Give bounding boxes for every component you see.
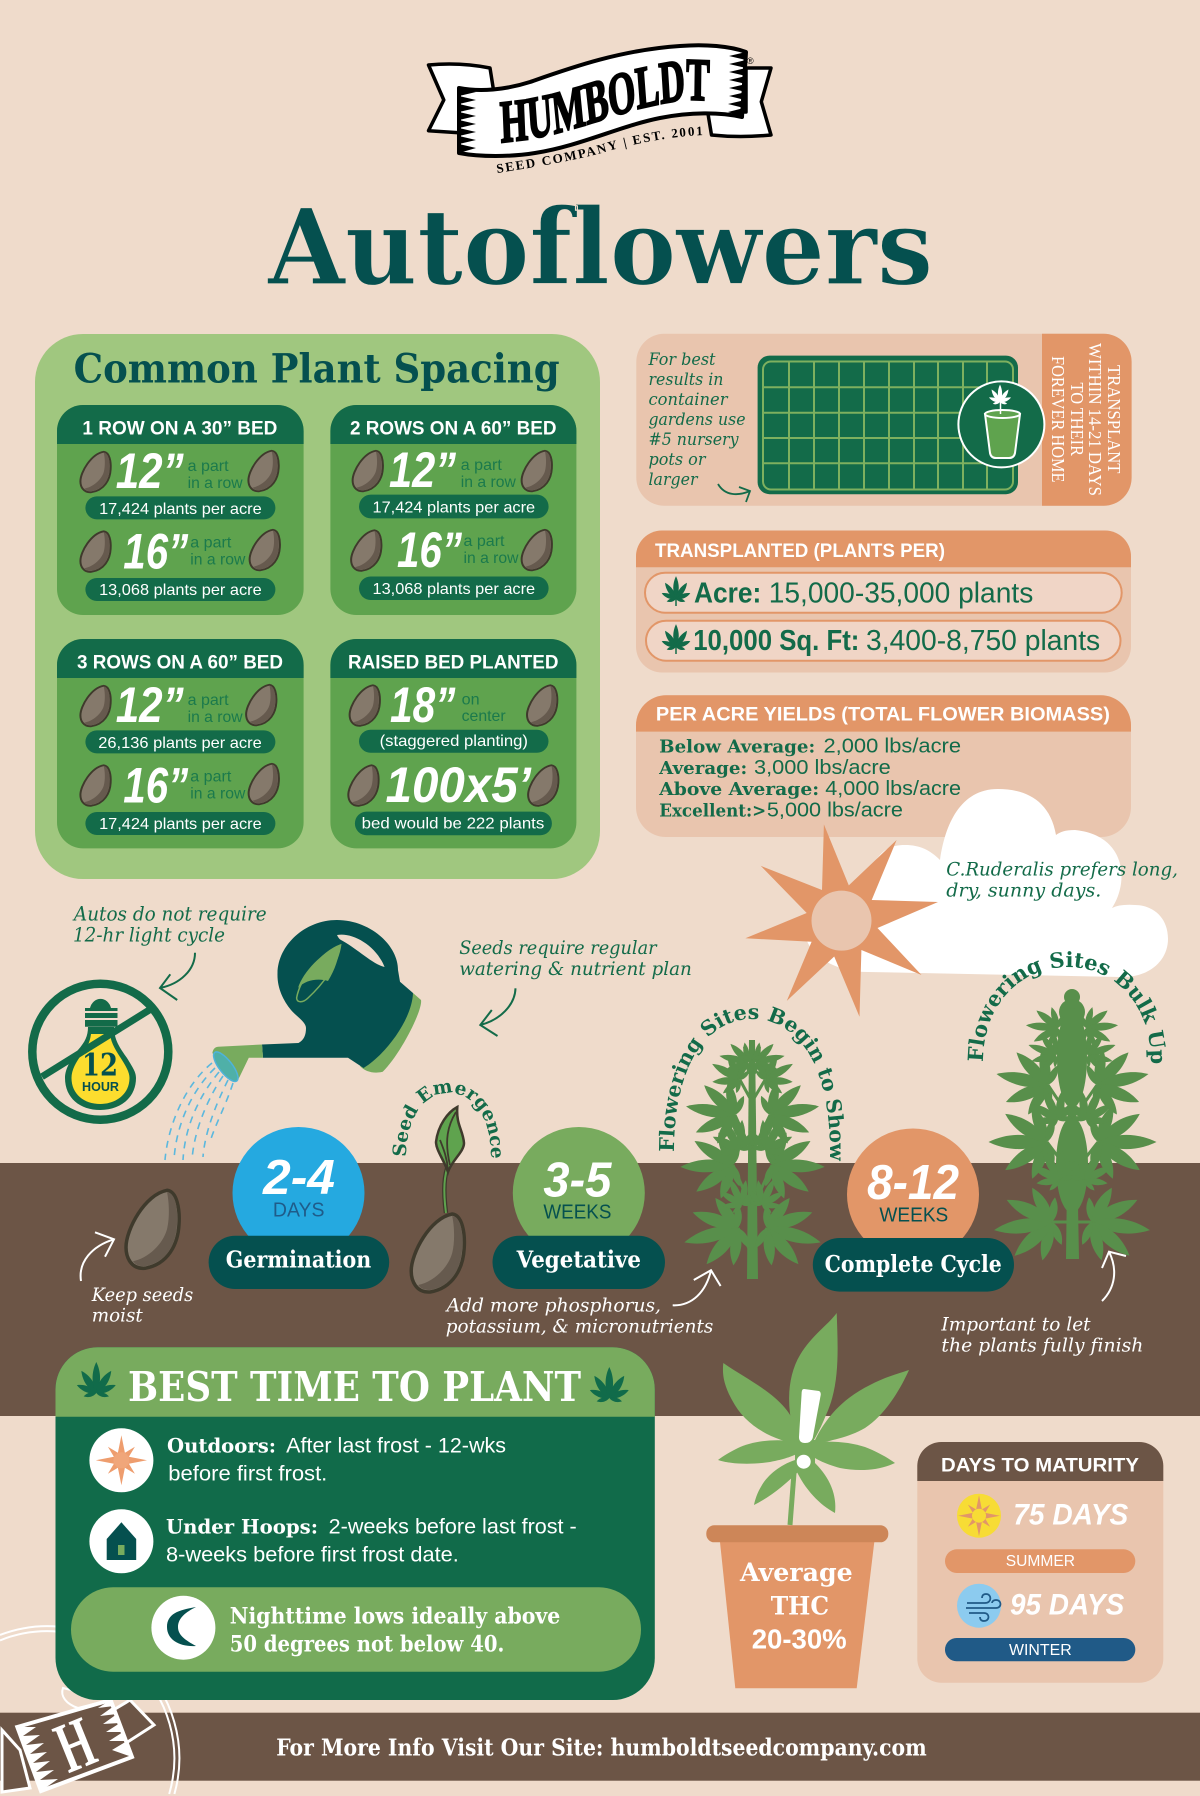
yield list: 4,000 lbs/acre [825, 778, 961, 800]
seedling [411, 1107, 464, 1292]
arrow to mature plant [1102, 1252, 1126, 1301]
seedling tray [758, 356, 1018, 494]
card: raised bed planted: on [462, 691, 480, 708]
yield list: 2,000 lbs/acre [824, 736, 961, 758]
card: 3 rows on a 60 inch bed: a part [188, 692, 229, 709]
panel: best time to plant [56, 1347, 655, 1700]
note: watering: Seeds require regular [459, 937, 658, 959]
cloud note [946, 858, 1178, 902]
note: keep seeds moist: moist [92, 1305, 143, 1327]
footer band [0, 1713, 1200, 1781]
illustration: flowering plant [675, 1037, 830, 1279]
registered mark: ® [747, 56, 754, 66]
icon: potted seedling [958, 381, 1044, 467]
card: 2 rows on a 60 inch bed: in a row [461, 474, 516, 491]
note: light cycle [72, 902, 267, 947]
vertical transplant note: TRANSPLANT [1104, 365, 1124, 474]
ground band [0, 1163, 1200, 1416]
germinating seed [126, 1190, 179, 1268]
cloud note: dry, sunny days. [946, 880, 1101, 902]
arrow to seed [81, 1232, 114, 1281]
panel: days to maturity: DAYS TO MATURITY [941, 1455, 1139, 1476]
card: 2 rows on a 60 inch bed: 16” [397, 522, 462, 578]
illustration: potted plant with THC: 20-30% [752, 1623, 847, 1654]
panel: common plant spacing [35, 334, 600, 879]
cloud note: C.Ruderalis prefers long, [946, 858, 1178, 880]
outdoors row: Outdoors: [167, 1434, 276, 1458]
container tip text: For best [648, 350, 716, 370]
container tip text: #5 nursery [648, 430, 739, 450]
container tip text [648, 350, 746, 490]
note: keep seeds moist [91, 1284, 194, 1327]
card: 2 rows on a 60 inch bed: a part [464, 533, 505, 550]
yield list: Above Average: [658, 779, 819, 800]
yield list [658, 736, 961, 821]
note: watering [459, 937, 692, 980]
icon: no 12-hour light bulb [32, 984, 168, 1120]
stage: complete cycle [813, 1128, 1014, 1292]
card: 3 rows on a 60 inch bed: in a row [190, 786, 246, 802]
card: raised bed planted: 100x5’ [386, 757, 532, 813]
panel: container garden tip [636, 334, 1132, 506]
under hoops row: Under Hoops: [166, 1514, 318, 1538]
illustration: potted plant with THC [706, 1313, 909, 1688]
panel: per acre yields: PER ACRE YIELDS (TOTAL FLOWER BIOMASS) [656, 705, 1110, 726]
card: 1 row on a 30 inch bed [57, 405, 304, 615]
card: 3 rows on a 60 inch bed: 3 ROWS ON A 60” BED [77, 652, 283, 674]
card: 3 rows on a 60 inch bed: 26,136 plants per acre [98, 735, 262, 752]
card: 1 row on a 30 inch bed: 12” [116, 443, 184, 499]
vertical transplant note: TO THEIR [1067, 382, 1087, 456]
arrow to seedling [480, 988, 516, 1036]
stage: germination [209, 1127, 389, 1289]
cloud [807, 789, 1168, 977]
card: raised bed planted: center [462, 708, 506, 725]
outdoors row [89, 1428, 506, 1492]
card: 3 rows on a 60 inch bed: a part [190, 768, 232, 786]
panel: transplanted plants per [636, 530, 1131, 672]
nighttime callout: Nighttime lows ideally above [230, 1603, 560, 1629]
stage: vegetative [492, 1127, 665, 1289]
stage: vegetative: 3-5 [543, 1154, 612, 1208]
card: 3 rows on a 60 inch bed: 12” [116, 677, 184, 733]
yield list: 5,000 lbs/acre [767, 799, 903, 821]
container tip text: pots or [648, 450, 706, 470]
panel: per acre yields [636, 695, 1131, 837]
card: 1 row on a 30 inch bed: in a row [188, 475, 243, 492]
note: let plants finish: Important to let [940, 1314, 1091, 1336]
container tip text: results in [648, 370, 724, 390]
note: keep seeds moist: Keep seeds [91, 1284, 194, 1306]
vertical transplant note: WITHIN 14-21 DAYS [1085, 343, 1105, 496]
note: let plants finish: the plants fully finish [941, 1335, 1143, 1357]
summer row: SUMMER [1006, 1553, 1075, 1570]
note: watering: watering & nutrient plan [459, 958, 692, 980]
icon: no 12-hour light bulb: 12 [82, 1048, 118, 1084]
logo wordmark: HUMBOLDT [499, 59, 710, 144]
icon: watering can [210, 920, 421, 1085]
icon: left leaf [76, 1362, 117, 1398]
orange side tab [1042, 334, 1132, 506]
10,000 sq ft row: 3,400-8,750 plants [866, 625, 1100, 657]
container tip text: gardens use [648, 410, 746, 430]
vertical transplant note [1048, 343, 1124, 496]
bottom-left brand stamp: H [44, 1701, 106, 1788]
icon: right leaf [589, 1367, 630, 1403]
card: raised bed planted: RAISED BED PLANTED [348, 652, 558, 674]
note: nutrients: Add more phosphorus, [445, 1295, 661, 1317]
stage: germination: DAYS [273, 1200, 324, 1222]
acre row: 15,000-35,000 plants [769, 578, 1033, 610]
panel: days to maturity [917, 1442, 1163, 1683]
stage: complete cycle: 8-12 [867, 1156, 959, 1210]
acre row: Acre: [694, 578, 761, 610]
stage: germination: Germination [226, 1246, 371, 1273]
card: 2 rows on a 60 inch bed: in a row [464, 550, 519, 567]
stage: complete cycle: WEEKS [879, 1204, 948, 1226]
card: 1 row on a 30 inch bed: 17,424 plants per acre [99, 501, 262, 518]
card: raised bed planted: (staggered planting) [380, 733, 528, 750]
card: 3 rows on a 60 inch bed: in a row [188, 709, 243, 726]
note: light cycle: Autos do not require [72, 902, 267, 926]
card: 2 rows on a 60 inch bed: 13,068 plants per acre [372, 581, 535, 598]
icon: sun [745, 824, 938, 1017]
card: raised bed planted: 18” [390, 677, 456, 733]
card: raised bed planted [330, 639, 576, 848]
yield list: Average: [658, 758, 747, 779]
stage: germination: 2-4 [262, 1151, 335, 1205]
stage: vegetative: WEEKS [543, 1201, 611, 1223]
illustration: potted plant with THC: Average [739, 1558, 853, 1587]
illustration: mature plant [988, 989, 1156, 1269]
yield list: Below Average: [659, 737, 815, 758]
card: 1 row on a 30 inch bed: a part [188, 458, 229, 475]
arc label: flowering sites bulk up: Flowering Sites Bulk Up [968, 951, 1166, 1064]
panel heading: Common Plant Spacing [74, 346, 560, 392]
arc label: seed emergence: Seed Emergence [392, 1082, 501, 1158]
footer link text: For More Info Visit Our Site: humboldtseedcompany.com [276, 1735, 927, 1762]
card: 1 row on a 30 inch bed: 16” [123, 523, 188, 579]
arrow to flowering plant [673, 1270, 721, 1305]
yield list: 3,000 lbs/acre [754, 757, 891, 779]
stage: vegetative: Vegetative [516, 1246, 641, 1273]
card: 2 rows on a 60 inch bed: 17,424 plants per acre [372, 500, 535, 516]
arrow to seedling tray [718, 484, 750, 502]
card: 2 rows on a 60 inch bed [330, 405, 576, 615]
summer row [945, 1494, 1135, 1573]
outdoors row: After last frost - 12-wks [286, 1435, 506, 1458]
10,000 sq ft row: 10,000 Sq. Ft: [693, 625, 859, 657]
card: 2 rows on a 60 inch bed: 2 ROWS ON A 60” BED [350, 418, 556, 440]
bottom-left brand stamp [0, 1626, 179, 1794]
card: 1 row on a 30 inch bed: 13,068 plants per acre [99, 582, 262, 599]
card: 1 row on a 30 inch bed: in a row [190, 551, 246, 568]
title: Autoflowers [267, 185, 933, 309]
summer row: 75 DAYS [1013, 1498, 1128, 1531]
winter row [945, 1584, 1135, 1661]
panel: transplanted plants per: TRANSPLANTED (PLANTS PER) [655, 541, 945, 562]
card: 3 rows on a 60 inch bed: 16” [123, 758, 188, 814]
nighttime callout [71, 1587, 641, 1672]
arrow to light bulb [160, 953, 195, 1000]
under hoops row: 8-weeks before first frost date. [166, 1544, 459, 1567]
under hoops row [89, 1509, 577, 1573]
note: light cycle: 12-hr light cycle [73, 923, 225, 947]
10,000 sq ft row [646, 621, 1120, 661]
winter row: 95 DAYS [1010, 1588, 1124, 1621]
outdoors row: before first frost. [168, 1463, 327, 1486]
winter row: WINTER [1009, 1642, 1072, 1659]
brand logo banner [426, 43, 773, 173]
nighttime callout: 50 degrees not below 40. [230, 1632, 504, 1658]
card: 2 rows on a 60 inch bed: 12” [389, 442, 456, 498]
note: nutrients: potassium, & micronutrients [446, 1316, 714, 1338]
vertical transplant note: FOREVER HOME [1048, 356, 1068, 482]
stage: complete cycle: Complete Cycle [825, 1251, 1002, 1278]
illustration: potted plant with THC: THC [771, 1591, 829, 1620]
card: 3 rows on a 60 inch bed: 17,424 plants per acre [99, 816, 262, 833]
logo tagline: SEED COMPANY | EST. 2001 [496, 126, 702, 173]
card: 1 row on a 30 inch bed: 1 ROW ON A 30” BED [82, 418, 277, 440]
container tip text: larger [648, 470, 698, 490]
note: nutrients [445, 1295, 714, 1338]
heading: BEST TIME TO PLANT [128, 1363, 581, 1411]
card: 2 rows on a 60 inch bed: a part [461, 457, 502, 474]
note: let plants finish [940, 1314, 1143, 1357]
yield list: Excellent:> [659, 800, 766, 821]
card: 1 row on a 30 inch bed: a part [190, 534, 232, 551]
under hoops row: 2-weeks before last frost - [329, 1515, 577, 1538]
arc label: flowering sites begin to show: Flowering Sites Begin to Show [658, 1006, 844, 1162]
icon: no 12-hour light bulb: HOUR [82, 1079, 120, 1094]
container tip text: container [648, 390, 728, 410]
card: 3 rows on a 60 inch bed [57, 639, 304, 848]
card: raised bed planted: bed would be 222 plants [362, 815, 544, 832]
acre row [645, 573, 1122, 613]
water spray [165, 1063, 233, 1160]
